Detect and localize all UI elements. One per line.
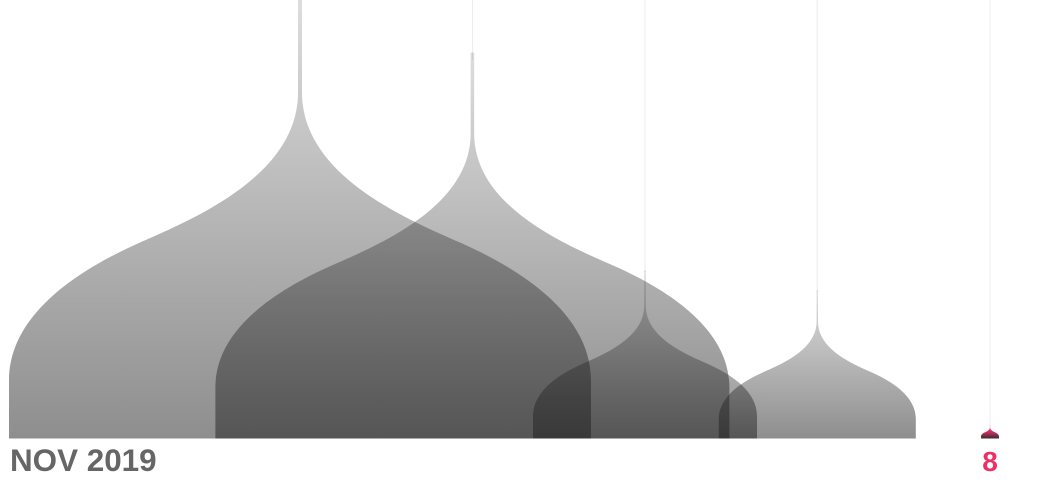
guide lines — [472, 0, 990, 430]
dome: first bar — [9, 0, 591, 438]
dome: third bar — [533, 270, 757, 438]
date label: NOV 2019 — [10, 443, 157, 478]
dome: highlighted bar — [981, 424, 999, 438]
dome: second bar — [215, 52, 729, 439]
dome: fourth bar — [719, 290, 916, 438]
value label: 8 — [982, 446, 998, 477]
